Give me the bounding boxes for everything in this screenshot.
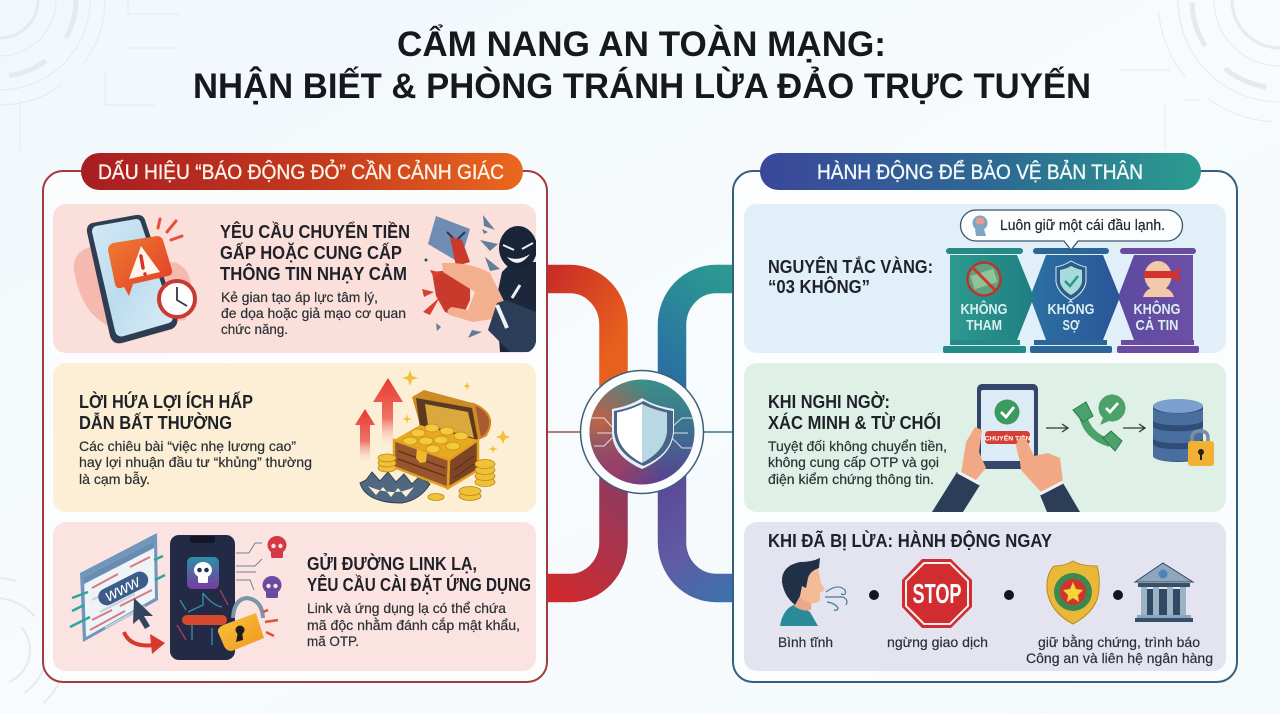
text: promises description: là cạm bẫy. <box>79 471 150 487</box>
divider dot 1 <box>869 590 879 600</box>
arrow: phone to database <box>1123 424 1145 432</box>
text: stop transactions: ngừng giao dịch <box>887 634 988 650</box>
text: links heading <box>307 553 531 595</box>
text: act now heading: KHI ĐÃ BỊ LỪA: HÀNH ĐỘNG NGAY <box>768 530 1053 551</box>
right panel heading pill: HÀNH ĐỘNG ĐỂ BẢO VỆ BẢN THÂN <box>817 161 1143 184</box>
icon: red skull <box>268 536 286 558</box>
text: promises description <box>79 438 312 487</box>
column: no greed / no fear / no gullibility <box>943 248 1199 353</box>
title: CẨM NANG AN TOÀN MẠNG: <box>397 24 886 64</box>
icon: malicious browser window: www <box>102 571 145 605</box>
left panel heading pill: DẤU HIỆU “BÁO ĐỘNG ĐỎ” CẦN CẢNH GIÁC <box>98 160 504 184</box>
icon: open padlock <box>218 598 278 651</box>
text: promises heading <box>79 391 253 433</box>
icon: stop sign <box>902 559 972 628</box>
icon: stop sign: STOP <box>912 578 962 609</box>
icon: hands holding tablet: CHUYỂN TIỀN <box>984 432 1031 442</box>
text: verify description: điện kiểm chứng thông tin. <box>768 471 934 487</box>
central shield hub <box>580 370 704 494</box>
text: request description <box>221 289 406 337</box>
text: promises description: hay lợi nhuận đầu tư “khủng” thường <box>79 454 312 470</box>
text: three nos labels: CẢ TIN <box>1136 317 1178 334</box>
text: three nos labels: THAM <box>966 317 1002 334</box>
text: verify description: Tuyệt đối không chuyển tiền, <box>768 438 947 454</box>
callout: keep a cool head: Luôn giữ một cái đầu lạnh. <box>1000 218 1165 234</box>
text: request description: Kẻ gian tạo áp lực tâm lý, <box>221 289 378 305</box>
icon: phone with alert and clock <box>74 215 195 343</box>
right panel frame <box>733 171 1237 682</box>
text: links heading: YÊU CẦU CÀI ĐẶT ỨNG DỤNG <box>307 574 531 595</box>
text: links description: mã OTP. <box>307 633 359 649</box>
text: request description: chức năng. <box>221 321 288 337</box>
central connector ribbons <box>547 279 733 588</box>
left panel frame <box>43 171 547 682</box>
callout: keep a cool head <box>960 210 1182 250</box>
text: request heading: GẤP HOẶC CUNG CẤP <box>220 242 402 263</box>
panel: golden rule three nos <box>744 204 1226 353</box>
text: three nos labels: KHÔNG <box>1134 300 1180 318</box>
divider dot 3 <box>1113 590 1123 600</box>
text: three nos labels: SỢ <box>1062 317 1080 334</box>
title <box>193 24 1091 106</box>
text: three nos labels <box>960 300 1180 334</box>
panel: when in doubt verify and refuse <box>744 363 1226 512</box>
text: golden rule heading: “03 KHÔNG” <box>768 276 870 297</box>
icon: scammer with torn mask <box>422 215 537 352</box>
panel: too-good promises <box>53 363 536 512</box>
icon: malicious browser window <box>70 533 165 654</box>
icon: green phone call <box>1073 394 1126 451</box>
divider dot 2 <box>1004 590 1014 600</box>
icon: locked database <box>1153 399 1214 466</box>
text: promises heading: LỜI HỨA LỢI ÍCH HẤP <box>79 391 253 412</box>
icon: infected phone with skull <box>170 535 262 660</box>
text: verify description <box>768 438 947 487</box>
text: links description: Link và ứng dụng lạ có thể chứa <box>307 600 506 616</box>
icon: treasure chest, arrows and trap <box>355 370 510 503</box>
text: request heading: THÔNG TIN NHẠY CẢM <box>220 263 407 284</box>
text: links heading: GỬI ĐƯỜNG LINK LẠ, <box>307 553 477 574</box>
text: three nos labels: KHÔNG <box>960 300 1008 318</box>
text: golden rule heading <box>768 256 933 297</box>
arrow: tablet to phone <box>1046 424 1068 432</box>
left panel heading pill <box>81 153 523 190</box>
panel: suspicious links <box>53 522 536 671</box>
panel: urgent money request <box>53 204 537 353</box>
right panel heading pill <box>760 153 1201 190</box>
icon: person breathing <box>780 558 847 626</box>
text: golden rule heading: NGUYÊN TẮC VÀNG: <box>768 256 933 277</box>
text: verify heading: XÁC MINH & TỪ CHỐI <box>768 412 941 433</box>
text: verify heading <box>768 391 941 433</box>
icon: police badge <box>1047 561 1099 624</box>
icon: banned money <box>968 262 1000 296</box>
text: links description <box>307 600 520 649</box>
text: links description: mã độc nhằm đánh cắp mật khẩu, <box>307 617 520 633</box>
icon: bank <box>1135 563 1193 622</box>
text: keep evidence and report: giữ bằng chứng, trình báo <box>1038 634 1200 650</box>
text: request heading <box>220 221 410 284</box>
text: verify heading: KHI NGHI NGỜ: <box>768 391 890 412</box>
text: stay calm: Bình tĩnh <box>778 634 833 650</box>
title: NHẬN BIẾT & PHÒNG TRÁNH LỪA ĐẢO TRỰC TUYẾN <box>193 66 1091 106</box>
text: verify description: không cung cấp OTP và gọi <box>768 454 939 470</box>
text: keep evidence and report: Công an và liên hệ ngân hàng <box>1026 650 1213 666</box>
text: promises heading: DẪN BẤT THƯỜNG <box>79 412 232 433</box>
panel: when scammed act now <box>744 522 1226 671</box>
text: keep evidence and report <box>1026 634 1213 666</box>
text: request heading: YÊU CẦU CHUYỂN TIỀN <box>220 221 410 242</box>
text: request description: đe dọa hoặc giả mạo cơ quan <box>221 305 406 321</box>
icon: blindfolded head <box>1143 261 1181 297</box>
icon: purple skull <box>262 576 282 598</box>
text: promises description: Các chiêu bài “việc nhẹ lương cao” <box>79 438 296 454</box>
text: three nos labels: KHÔNG <box>1048 300 1094 318</box>
icon: check shield <box>1056 261 1086 300</box>
icon: hands holding tablet <box>932 384 1080 512</box>
